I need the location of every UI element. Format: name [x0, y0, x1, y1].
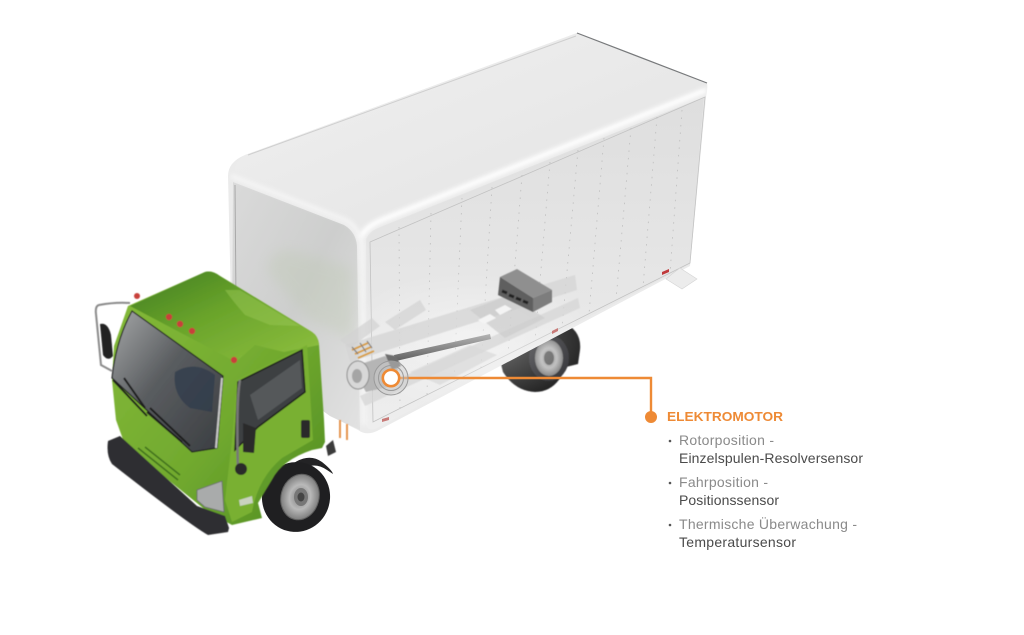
side window — [235, 350, 305, 450]
left mirror — [100, 324, 113, 359]
electric motor — [347, 341, 401, 392]
bullet: thermal monitoring: Temperatursensor — [679, 534, 796, 550]
motor end cap — [347, 361, 369, 389]
upper frame rail — [345, 275, 577, 362]
tyre — [254, 454, 338, 540]
door handle — [301, 420, 310, 438]
motor housing — [352, 356, 398, 392]
bullet: drive position: Positionssensor — [679, 492, 779, 508]
roof seam — [248, 36, 576, 155]
left mirror bracket — [96, 303, 130, 371]
wipers — [113, 378, 190, 446]
hub — [294, 488, 308, 506]
orange cab-mount pipes — [340, 420, 347, 440]
callout leader line — [391, 378, 651, 417]
bullet: rotor position — [669, 432, 863, 466]
callout marker on motor — [374, 361, 408, 395]
rear-left ghost parts — [340, 300, 426, 348]
cab roof — [130, 272, 319, 362]
box front face — [498, 277, 533, 312]
fender — [283, 458, 333, 478]
connectors — [502, 291, 528, 303]
side marker step — [239, 496, 253, 506]
cab body — [112, 272, 325, 525]
drive shaft — [394, 334, 491, 361]
rear tab — [666, 268, 697, 289]
motor connector — [385, 354, 401, 370]
bullet: rotor position: Rotorposition - — [679, 432, 774, 448]
box right face — [533, 290, 552, 312]
front left edge — [235, 185, 236, 300]
green cab — [96, 272, 347, 535]
window interior — [250, 360, 302, 420]
light glow around chassis — [340, 270, 600, 410]
bullet: thermal monitoring — [669, 515, 857, 550]
callout text — [667, 409, 863, 550]
controller box — [498, 269, 552, 312]
bumper — [108, 436, 229, 535]
box roof — [234, 33, 707, 236]
rear roof edge — [577, 33, 707, 83]
rear wheel — [500, 322, 580, 392]
rim — [276, 470, 324, 524]
side marker lights — [662, 269, 669, 275]
door panel — [225, 345, 313, 522]
heading: ELEKTROMOTOR — [667, 409, 784, 424]
grille — [138, 447, 180, 480]
orange terminals — [352, 343, 374, 358]
bullet: thermal monitoring: Thermische Überwachung - — [679, 515, 857, 532]
bullet: rotor position: Einzelspulen-Resolversensor — [679, 450, 863, 466]
chrome windshield pillar — [216, 378, 222, 448]
ghosted cab behind box — [268, 250, 354, 340]
chassis — [340, 275, 580, 406]
box front panel — [232, 182, 360, 430]
panel outline — [370, 97, 705, 422]
roof highlight — [360, 90, 706, 238]
roof light patch — [225, 290, 300, 326]
box silhouette — [228, 33, 707, 433]
windshield — [112, 311, 223, 452]
bullet: drive position — [669, 474, 779, 508]
door mirror — [243, 423, 256, 453]
cross members — [470, 295, 545, 338]
lower frame rail — [360, 298, 580, 406]
panel seams — [399, 110, 682, 408]
box side panel — [366, 97, 704, 429]
box top — [500, 269, 552, 298]
bullet: drive position: Fahrposition - — [679, 474, 768, 490]
front mirror arm — [237, 380, 240, 470]
headlight — [197, 481, 224, 512]
lower ghost battery — [410, 345, 497, 385]
callout end dot — [645, 411, 657, 423]
front corner highlight — [231, 176, 364, 425]
interior seat — [175, 367, 215, 412]
roof lights — [134, 293, 237, 363]
front wheel — [254, 454, 338, 540]
cargo box — [228, 33, 707, 433]
